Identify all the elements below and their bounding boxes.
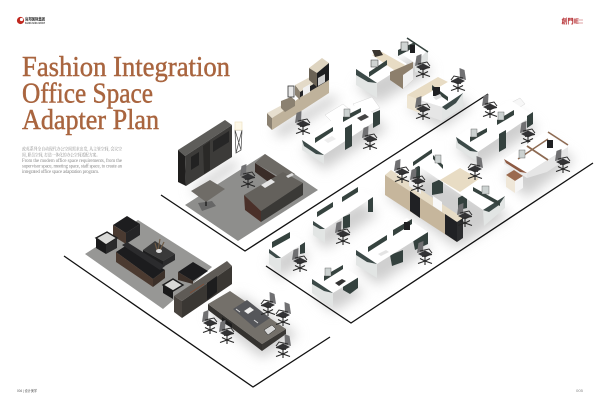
bottom desk: double <box>356 218 428 278</box>
chair <box>451 68 466 92</box>
logo: left brand <box>17 16 45 25</box>
workstation cluster: top <box>356 38 428 98</box>
intro text block: From the modern office space requirements, from the <box>22 159 122 164</box>
chair <box>415 54 430 78</box>
chair <box>335 221 350 245</box>
bookcase <box>178 120 232 186</box>
chair <box>417 241 432 265</box>
floor shadows <box>190 56 575 358</box>
chairs <box>394 159 472 227</box>
floor lamp <box>235 122 242 153</box>
footer: left page number: 004 | 设计美学 <box>17 388 37 393</box>
meeting chairs <box>202 292 291 358</box>
armchair: top <box>113 216 140 244</box>
executive room <box>178 120 318 241</box>
platform outline: workstation area <box>266 163 593 323</box>
platform outline: executive room <box>161 94 488 251</box>
executive chair <box>240 164 255 188</box>
upper desk: long <box>313 187 373 243</box>
credenza <box>174 261 232 318</box>
workstation cluster: wood-accent pod <box>504 132 568 193</box>
title: Adapter Plan <box>22 104 159 136</box>
chair <box>468 156 483 180</box>
intro text block <box>22 146 123 175</box>
intro text block: 政英系列全自动现代办公空间需求出发, 从主管空间, 会议空 <box>22 146 122 152</box>
chair <box>362 126 377 150</box>
armchair: lower <box>178 262 208 284</box>
side table <box>191 180 225 211</box>
workstation cluster: right pod <box>456 98 533 162</box>
long storage cabinet <box>385 170 463 242</box>
chair <box>555 149 570 173</box>
executive desk <box>244 154 303 222</box>
title <box>22 51 230 136</box>
logo: left brand: SHANG BANG GROUP <box>25 22 45 25</box>
chair <box>482 94 497 118</box>
end table: lower <box>163 279 183 299</box>
chair <box>295 111 310 135</box>
rug: lounge <box>85 220 212 309</box>
chair <box>292 248 307 272</box>
title: Fashion Integration <box>22 51 230 83</box>
workstation cluster: left pod <box>302 97 380 164</box>
meeting room <box>85 216 291 358</box>
logo: right brand: 創門IE:: <box>562 16 583 26</box>
coffee table <box>143 239 175 267</box>
workstation cluster: central long desk <box>413 149 505 226</box>
rug: executive <box>185 154 318 241</box>
middle desk: single <box>269 232 305 272</box>
intro text block: 间, 职员空间, 打造一体化的办公空间适配方案。 <box>22 152 100 158</box>
chair <box>415 96 430 120</box>
meeting table <box>208 291 286 351</box>
platform outline: meeting room <box>64 256 330 387</box>
title: Office Space <box>22 78 153 110</box>
workstation cluster: center pod <box>407 77 463 121</box>
intro text block: integrated office space adaptation program. <box>22 170 99 175</box>
footer: right page number: 005 <box>576 389 583 393</box>
upper cabinet <box>267 58 329 130</box>
desk top and end panel <box>356 50 407 83</box>
chair <box>520 121 535 145</box>
end table: top <box>96 232 117 254</box>
logo: left brand: 尚邦国际集团 <box>25 16 45 22</box>
intro text block: supervisor space, meeting space, staff space, to create an <box>22 164 123 170</box>
sofa <box>116 242 165 287</box>
bottom desk: single <box>312 263 359 307</box>
